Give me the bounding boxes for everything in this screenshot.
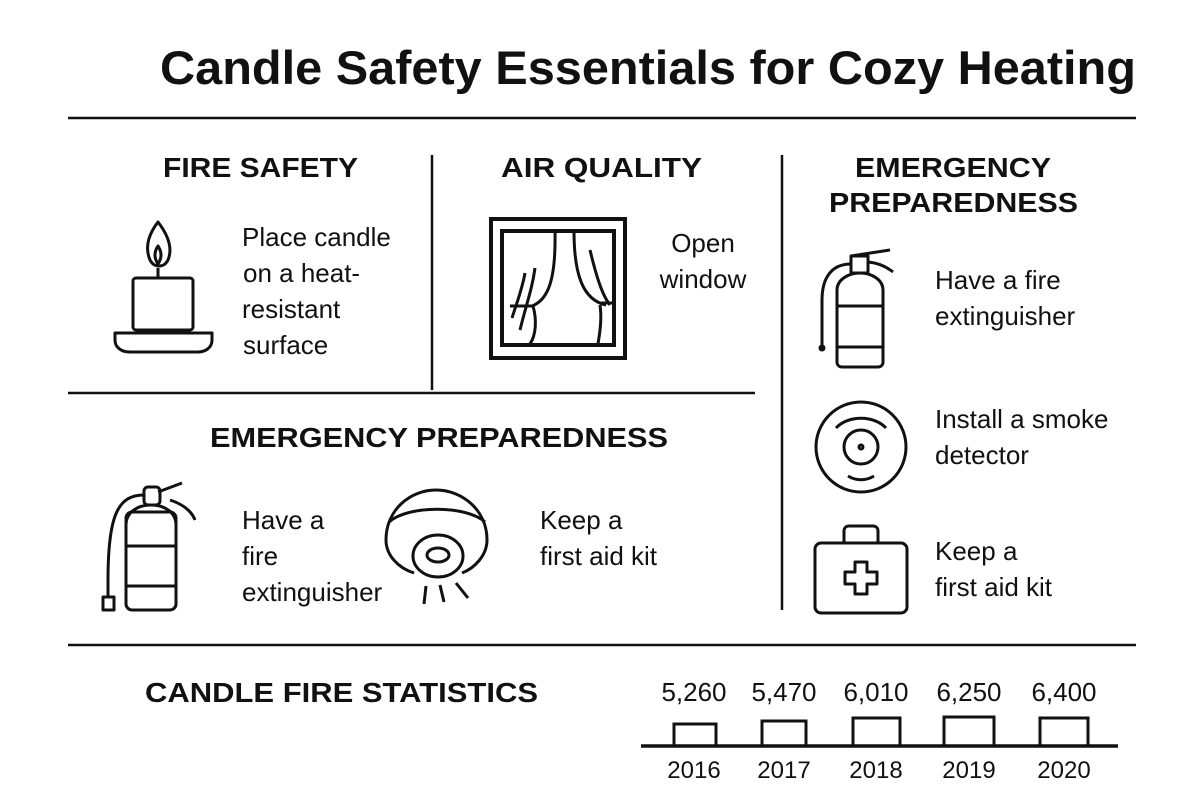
heading: emergency preparedness: EMERGENCY PREPAREDNESS (210, 422, 668, 453)
panel: emergency preparedness (right) (815, 152, 1108, 613)
text: keep a first aid kit: Keep a (935, 536, 1018, 566)
icon: fire extinguisher (103, 483, 195, 610)
bar chart: 2018 (849, 757, 903, 784)
bar chart (641, 677, 1118, 784)
bar chart: 6,250 (936, 677, 1002, 707)
icon: candle (115, 222, 212, 352)
text: install a smoke detector: Install a smoke (935, 404, 1108, 434)
text: fire safety tip: resistant (242, 294, 341, 324)
text: have a fire extinguisher: extinguisher (242, 577, 383, 607)
icon: extinguisher (820, 250, 893, 367)
heading: air quality: AIR QUALITY (501, 152, 702, 183)
icon: window (491, 219, 625, 358)
text: have a fire extinguisher: Have a fire (935, 265, 1061, 295)
panel: air quality (491, 152, 747, 358)
bar chart: 2020 (1037, 757, 1091, 784)
text: air quality tip: window (659, 264, 747, 294)
panel: candle fire statistics (145, 677, 1118, 784)
text: keep a first aid kit: first aid kit (935, 572, 1053, 602)
text: install a smoke detector: detector (935, 440, 1029, 470)
text: keep a first aid kit: Keep a (540, 505, 623, 535)
icon: smoke detector (386, 490, 487, 604)
bar chart: 5,470 (751, 677, 817, 707)
text: fire safety tip: Place candle (242, 222, 391, 252)
heading: fire safety: FIRE SAFETY (163, 152, 358, 183)
heading: emergency preparedness right: EMERGENCY (855, 152, 1051, 183)
icon: smoke detector circle (816, 402, 906, 492)
text: keep a first aid kit: first aid kit (540, 541, 658, 571)
text: have a fire extinguisher: extinguisher (935, 301, 1076, 331)
text: air quality tip: Open (671, 228, 735, 258)
icon: first aid kit (815, 526, 907, 613)
bar chart: 6,010 (843, 677, 909, 707)
title: Candle Safety Essentials for Cozy Heating (160, 41, 1136, 94)
bar chart: 2016 (667, 757, 721, 784)
panel: fire safety (115, 152, 391, 360)
text: have a fire extinguisher: fire (242, 541, 278, 571)
text: fire safety tip: on a heat- (243, 258, 360, 288)
panel: emergency preparedness (left) (103, 422, 668, 610)
heading: statistics: CANDLE FIRE STATISTICS (145, 677, 538, 708)
text: have a fire extinguisher: Have a (242, 505, 325, 535)
bar chart: 5,260 (661, 677, 727, 707)
heading: emergency preparedness right: PREPAREDNESS (829, 187, 1078, 218)
text: fire safety tip: surface (243, 330, 328, 360)
bar chart: 6,400 (1031, 677, 1097, 707)
bar chart: 2019 (942, 757, 996, 784)
bar chart: 2017 (757, 757, 811, 784)
